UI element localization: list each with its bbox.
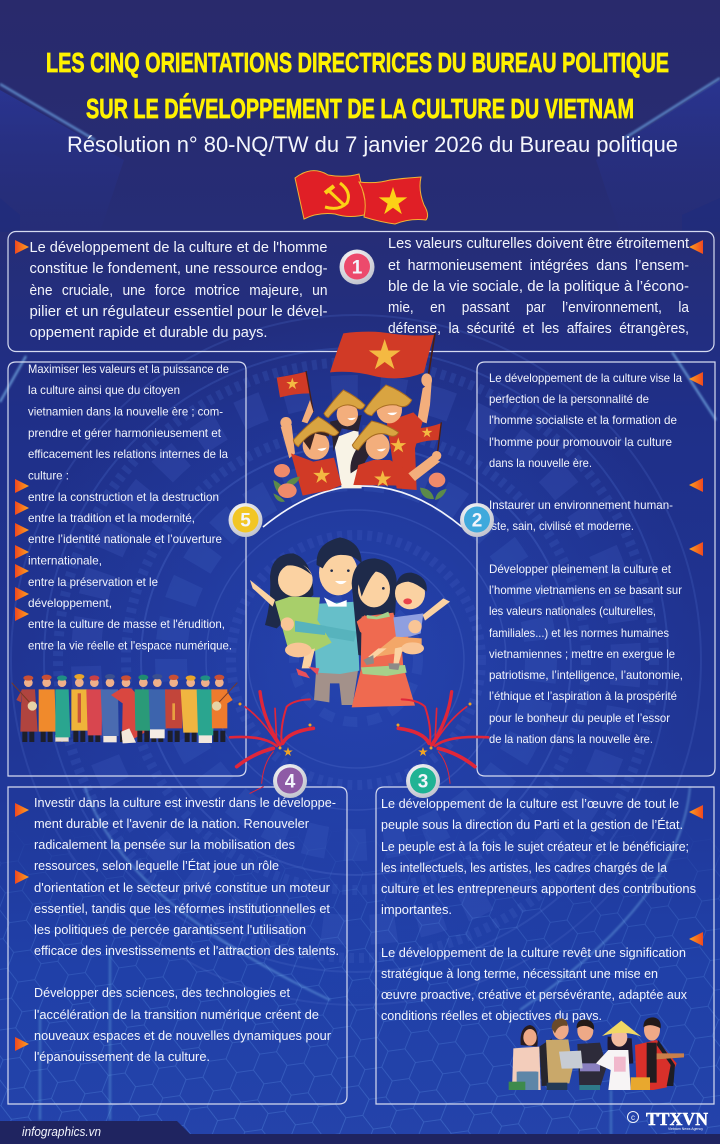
panel 5 text: vietnamien dans la nouvelle ère ; com- — [28, 406, 223, 418]
student 2 — [539, 1018, 573, 1090]
small flag left — [277, 371, 313, 412]
footer band — [0, 1121, 720, 1144]
panel 2 text: l’homme vietnamiens en se basant sur — [489, 584, 682, 597]
panel 1 left text: oppement rapide et durable du pays. — [30, 324, 268, 341]
panel 2 text: les valeurs nationales (culturelles, — [489, 605, 656, 618]
badge 5: 5 — [240, 510, 251, 532]
panel 5 text: entre la préservation et le — [28, 576, 158, 589]
badge 2: 2 — [472, 510, 482, 532]
panel 3 text: Le développement de la culture est l’œuvre de tout le — [381, 797, 679, 811]
logo: TTXVN: TTXVN — [646, 1109, 708, 1129]
panel 4 text: nouveaux espaces et de nouvelles dynamiques pour — [34, 1029, 331, 1043]
panel 4 text — [34, 796, 339, 1064]
panel 1 — [8, 232, 714, 352]
panel 5 text: efficacement les relations internes de la — [28, 448, 229, 461]
student 4 — [596, 1021, 641, 1090]
badge 1 — [340, 250, 374, 284]
badge 5 — [228, 503, 262, 537]
panel 5 — [8, 362, 246, 776]
badge 1: 1 — [352, 258, 363, 278]
title — [46, 47, 669, 124]
panel 2 text: l'homme socialiste et la formation de — [489, 414, 677, 427]
panel 1 left text — [30, 239, 328, 341]
fireworks right — [398, 692, 488, 783]
panel 4 text: l'épanouissement de la culture. — [34, 1050, 210, 1064]
panel 2 text: patriotisme, l’intelligence, l’autonomie, — [489, 669, 683, 682]
firework sparks — [238, 702, 472, 756]
panel 3 arrows — [689, 805, 703, 946]
man back right — [364, 373, 432, 490]
panel 2 text: de la nation dans la nouvelle ère. — [489, 733, 653, 746]
panel 2 text: Le développement de la culture vise la — [489, 372, 683, 385]
panel 3 — [376, 787, 714, 1104]
girl in green — [250, 553, 332, 678]
panel 2 text: vietnamiennes ; mettre en exergue le — [489, 648, 675, 661]
father — [295, 537, 362, 705]
panel 5 text: entre l’identité nationale et l’ouverture — [28, 533, 222, 546]
panel 3 text: conditions réelles et objectives du pays. — [381, 1009, 602, 1023]
panel 4 text: l'accélération de la transition numérique créent de — [34, 1008, 319, 1022]
panel 4 text: Développer des sciences, des technologies et — [34, 986, 290, 1000]
panel 2 arrows — [689, 372, 703, 556]
panel 2 text: Instaurer un environnement human- — [489, 499, 673, 512]
panel 5 text — [28, 363, 232, 652]
panel 2 text — [489, 372, 683, 746]
panel 2 text: l’éthique et l’aspiration à la prospérité — [489, 690, 677, 703]
badge 4 — [273, 764, 307, 798]
panel 2 text: perfection de la personnalité de — [489, 393, 649, 406]
panel 5 text: entre la tradition et la modernité, — [28, 512, 195, 525]
panel 1 left text: pilier et un régulateur essentiel pour le dével- — [30, 303, 328, 320]
panel 4 text: ressources, selon lequelle l’État joue un rôle — [34, 858, 279, 873]
panel 4 text: les politiques de percée garantissent l'utilisation — [34, 923, 306, 937]
panel 2 text: iste, sain, civilisé et moderne. — [489, 520, 634, 533]
panel 2 text: pour le bonheur du peuple et l’essor — [489, 712, 670, 725]
panel 4 arrows — [15, 803, 29, 1051]
panel 5 arrows — [15, 479, 29, 621]
panel 1 right text: défense, la sécurité et les affaires étrangères, — [388, 320, 689, 337]
badge 3: 3 — [418, 772, 428, 792]
panel 3 text: Le développement de la culture revêt une signification — [381, 946, 686, 960]
arrow right — [689, 240, 703, 254]
panel 2 text: l'homme pour promouvoir la culture — [489, 436, 672, 449]
subtitle: Résolution n° 80-NQ/TW du 7 janvier 2026 du Bureau politique — [67, 132, 678, 157]
panel 1 right text: ble de la vie sociale, de la politique à l’écono- — [388, 278, 689, 295]
central arch — [263, 486, 462, 527]
panel 5 text: entre la vie réelle et l'espace numérique. — [28, 640, 232, 652]
panel 4 text: d'orientation et le secteur privé constitue un moteur — [34, 881, 330, 895]
mother — [352, 558, 415, 707]
illustration: people with flags — [273, 332, 447, 502]
panel 1 left text: ène cruciale, une force motrice majeure, un — [30, 282, 328, 299]
woman in white — [324, 390, 365, 488]
panel 3 text: culture et les entrepreneurs apportent des contributions — [381, 882, 696, 896]
student 5 — [631, 1017, 684, 1090]
badge 4: 4 — [285, 772, 296, 792]
lotus right — [420, 473, 447, 500]
panel 1 right text: et harmonieusement intégrées dans l’ensem- — [388, 257, 689, 274]
small flag right — [414, 422, 441, 465]
panel 5 text: prendre et gérer harmonieusement et — [28, 427, 222, 440]
panel 4 text: efficace des investissements et l'attraction des talents. — [34, 944, 339, 958]
panel 3 text: importantes. — [381, 903, 452, 917]
panel 2 text: familiales...) et les normes humaines — [489, 627, 669, 640]
panel 2 — [477, 362, 715, 776]
panel 4 — [8, 787, 347, 1104]
woman front — [350, 421, 441, 487]
illustration: musicians in ao dai — [12, 674, 237, 743]
panel 1 left text: constitue le fondement, une ressource endog- — [30, 260, 328, 277]
icon: party and national flags — [295, 171, 428, 224]
panel 4 text: ment durable et l'avenir de la nation. Renouveler — [34, 817, 309, 831]
logo: TTXVN: c — [631, 1113, 635, 1122]
fireworks left — [230, 692, 313, 793]
panel 1 right text: mie, en passant par l’environnement, la — [388, 299, 690, 316]
panel 5 text: entre la culture de masse et l'érudition, — [28, 618, 225, 631]
arrow left — [15, 240, 29, 254]
illustration: students — [509, 1017, 684, 1090]
big flag — [330, 332, 435, 397]
illustration: family — [250, 537, 450, 707]
panel 1 right text: Les valeurs culturelles doivent être étroitement — [388, 235, 690, 252]
panel 4 text: radicalement la pensée sur la mobilisation des — [34, 838, 295, 852]
panel 5 text: développement, — [28, 597, 112, 610]
student 3 — [559, 1019, 607, 1090]
boy — [363, 573, 450, 670]
panel 5 text: internationale, — [28, 554, 102, 568]
panel 1 left text: Le développement de la culture et de l'homme — [30, 239, 328, 256]
panel 5 text: Maximiser les valeurs et la puissance de — [28, 363, 229, 376]
panel 3 text — [381, 797, 696, 1023]
student 1 — [509, 1025, 541, 1090]
panel 3 text: Le peuple est à la fois le sujet créateur et le bénéficiaire; — [381, 840, 689, 854]
panel 3 text: les intellectuels, les artistes, les cadres chargés de la — [381, 861, 667, 875]
panel 1 right text — [388, 235, 690, 337]
panel 2 text: Développer pleinement la culture et — [489, 563, 672, 576]
panel 3 text: peuple sous la direction du Parti et la gestion de l’État. — [381, 817, 683, 832]
panel 3 text: œuvre proactive, créative et persévérante, adaptée aux — [381, 988, 688, 1002]
panel 5 text: entre la construction et la destruction — [28, 491, 219, 504]
logo: TTXVN — [628, 1109, 708, 1131]
logo: TTXVN: Vietnam News Agency — [668, 1127, 703, 1131]
panel 2 text: dans la nouvelle ère. — [489, 457, 592, 470]
panel 4 text: Investir dans la culture est investir dans le développe- — [34, 796, 336, 810]
panel 5 text: la culture ainsi que du citoyen — [28, 384, 180, 397]
panel 4 text: essentiel, tandis que les réformes institutionnelles et — [34, 902, 331, 916]
badge 2 — [460, 503, 494, 537]
panel 5 text: culture : — [28, 470, 69, 482]
badge 3 — [406, 764, 440, 798]
panel 3 text: stratégique à long terme, nécessitant une mise en — [381, 967, 658, 981]
source text: infographics.vn — [22, 1124, 101, 1139]
lotus left — [273, 464, 300, 502]
man front left — [280, 400, 342, 496]
